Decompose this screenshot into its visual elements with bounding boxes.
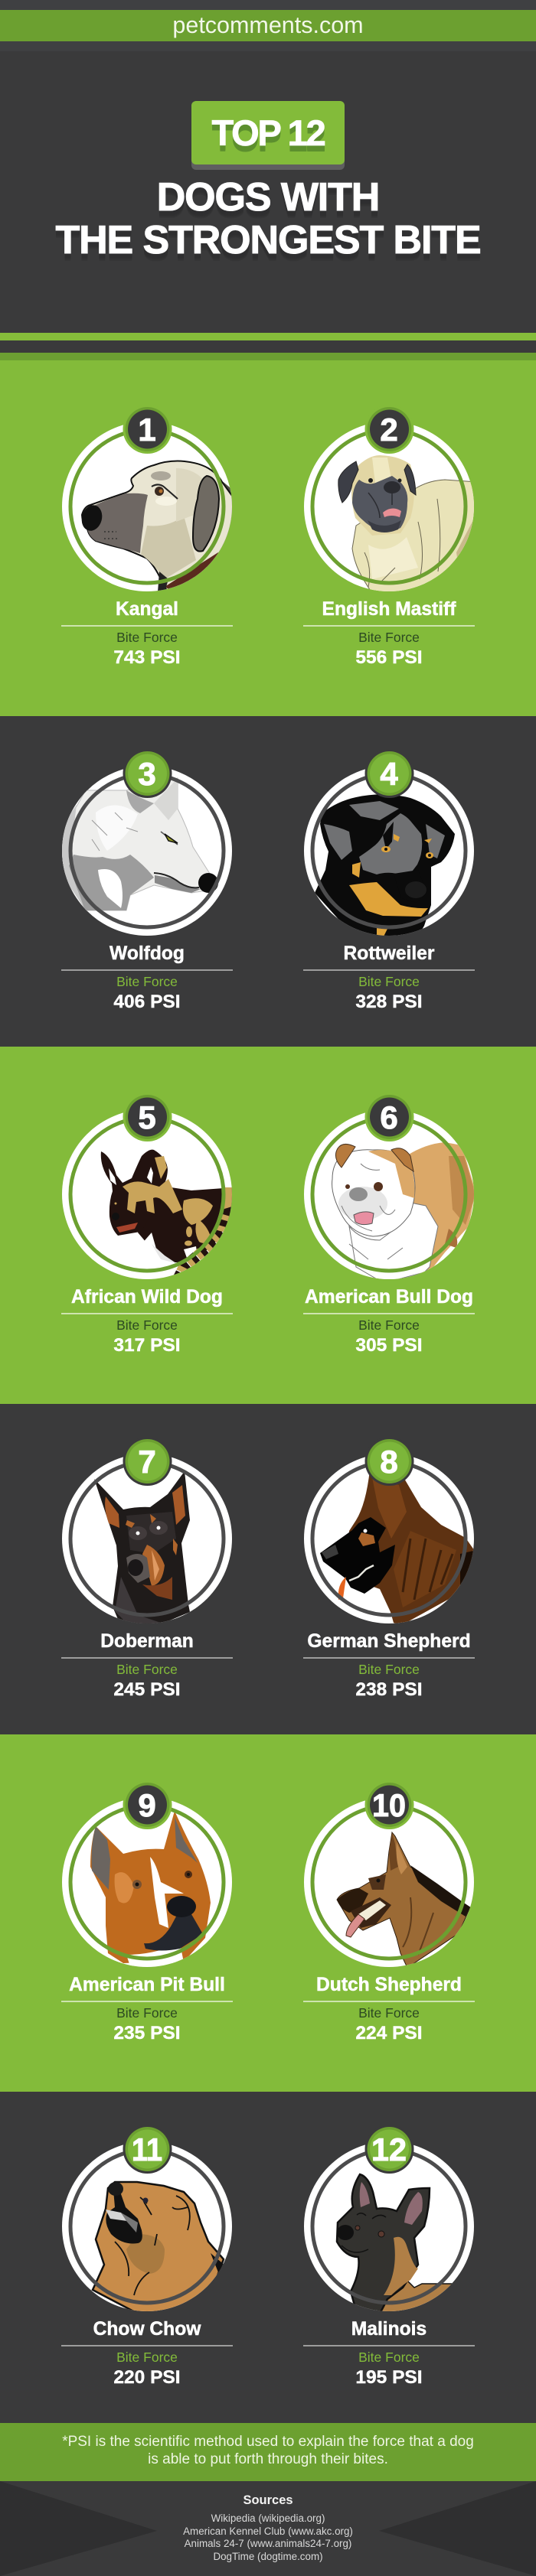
number badge 4: 4 [380,756,398,792]
bite force value: 235 PSI [113,2023,181,2044]
bite force label: Bite Force [358,2005,420,2021]
card: German Shepherd [303,1439,475,1700]
number badge 5: 5 [138,1099,156,1135]
bite force label: Bite Force [116,630,178,645]
bite force value: 195 PSI [355,2367,423,2388]
dog name: Kangal [116,599,178,620]
number badge 2 [364,405,413,454]
bite force value: 238 PSI [355,1679,423,1700]
illustration: German Shepherd [320,1470,476,1626]
bite force value: 305 PSI [355,1335,423,1356]
dog name: Wolfdog [109,943,185,964]
panel: green row 5 background [0,1734,536,2092]
illustration: Dutch Shepherd [337,1832,470,1968]
sources list: Wikipedia (wikipedia.org) [211,2512,325,2524]
dog name: Malinois [351,2319,427,2340]
bite force label: Bite Force [116,2005,178,2021]
bite force label: Bite Force [358,2350,420,2365]
title block [55,101,481,262]
bite force value: 317 PSI [113,1335,181,1356]
card: Dutch Shepherd [303,1783,475,2044]
illustration: Doberman [94,1471,190,1627]
number badge 1 [123,405,172,454]
card: Rottweiler [303,751,475,1012]
card: Chow Chow [61,2127,233,2388]
dog name: Chow Chow [93,2319,201,2340]
card: African Wild Dog [61,1095,233,1356]
dog name: American Bull Dog [305,1287,473,1308]
footer sources panel [0,2481,536,2576]
header stripes [0,333,536,340]
number badge 2: 2 [380,412,398,448]
number badge 7: 7 [138,1444,156,1480]
number badge 9: 9 [138,1787,156,1823]
number badge 8: 8 [380,1444,398,1480]
card: English Mastiff [303,407,475,668]
number badge 12 [364,2125,413,2174]
number badge 12: 12 [371,2131,407,2167]
bite force value: 224 PSI [355,2023,423,2044]
card: Wolfdog [61,751,233,1012]
site name: petcomments.com [172,12,364,38]
number badge 7 [123,1437,172,1486]
main heading: DOGS WITH [157,175,379,220]
number badge 6 [364,1093,413,1141]
site header band [0,0,536,51]
number badge 6: 6 [380,1099,398,1135]
PSI footnote band: *PSI is the scientific method used to explain the force that a dog [62,2434,474,2450]
number badge 10 [364,1780,413,1829]
PSI footnote band [0,2423,536,2481]
dog name: Doberman [100,1631,194,1652]
illustration: African Wild Dog [101,1150,234,1282]
dog name: American Pit Bull [69,1975,225,1995]
panel: green row 3 background [0,1047,536,1404]
bite force value: 220 PSI [113,2367,181,2388]
sources heading: Sources [243,2493,293,2507]
dog name: English Mastiff [322,599,456,620]
card: Kangal [61,407,233,668]
badge: top 12: TOP 12 [211,112,325,153]
number badge 3 [123,749,172,798]
illustration: American Bull Dog [332,1142,476,1283]
bite force value: 245 PSI [113,1679,181,1700]
number badge 8 [364,1437,413,1486]
dog name: Rottweiler [344,943,435,964]
number badge 11: 11 [132,2131,162,2167]
card: American Pit Bull [61,1783,233,2044]
sources list: American Kennel Club (www.akc.org) [183,2526,353,2537]
card: American Bull Dog [303,1095,475,1356]
bite force label: Bite Force [116,1317,178,1333]
bite force value: 328 PSI [355,992,423,1012]
illustration: Chow Chow [93,2182,226,2314]
number badge 9 [123,1780,172,1829]
number badge 10: 10 [372,1787,406,1823]
bite force value: 743 PSI [113,647,181,668]
sources list: Animals 24-7 (www.animals24-7.org) [185,2538,351,2549]
number badge 11 [123,2125,172,2174]
bite force label: Bite Force [358,630,420,645]
bite force label: Bite Force [358,1317,420,1333]
bite force label: Bite Force [358,1662,420,1677]
illustration: Rottweiler [315,794,455,940]
bite force label: Bite Force [116,974,178,989]
dog name: Dutch Shepherd [316,1975,462,1995]
number badge 4 [364,749,413,798]
panel: green row 1 background [0,360,536,716]
illustration: Wolfdog [60,778,218,910]
bite force label: Bite Force [116,2350,178,2365]
card: Malinois [303,2127,475,2388]
number badge 1: 1 [138,412,156,448]
sources list: DogTime (dogtime.com) [213,2551,323,2562]
illustration: English Mastiff [338,455,476,594]
bite force value: 406 PSI [113,992,181,1012]
dog name: German Shepherd [307,1631,471,1652]
bite force label: Bite Force [116,1662,178,1677]
dog name: African Wild Dog [71,1287,223,1308]
illustration: Malinois [335,2173,452,2311]
badge: top 12 [191,101,345,164]
illustration: Kangal [79,461,234,595]
number badge 3: 3 [138,756,156,792]
card: Doberman [61,1439,233,1700]
main heading: THE STRONGEST BITE [55,218,481,262]
bite force label: Bite Force [358,974,420,989]
site name [0,10,536,41]
number badge 5 [123,1093,172,1141]
main heading [55,175,481,262]
sources list [183,2512,353,2562]
illustration: American Pit Bull [90,1811,211,1966]
PSI footnote band: is able to put forth through their bites. [148,2451,388,2467]
bite force value: 556 PSI [355,647,423,668]
